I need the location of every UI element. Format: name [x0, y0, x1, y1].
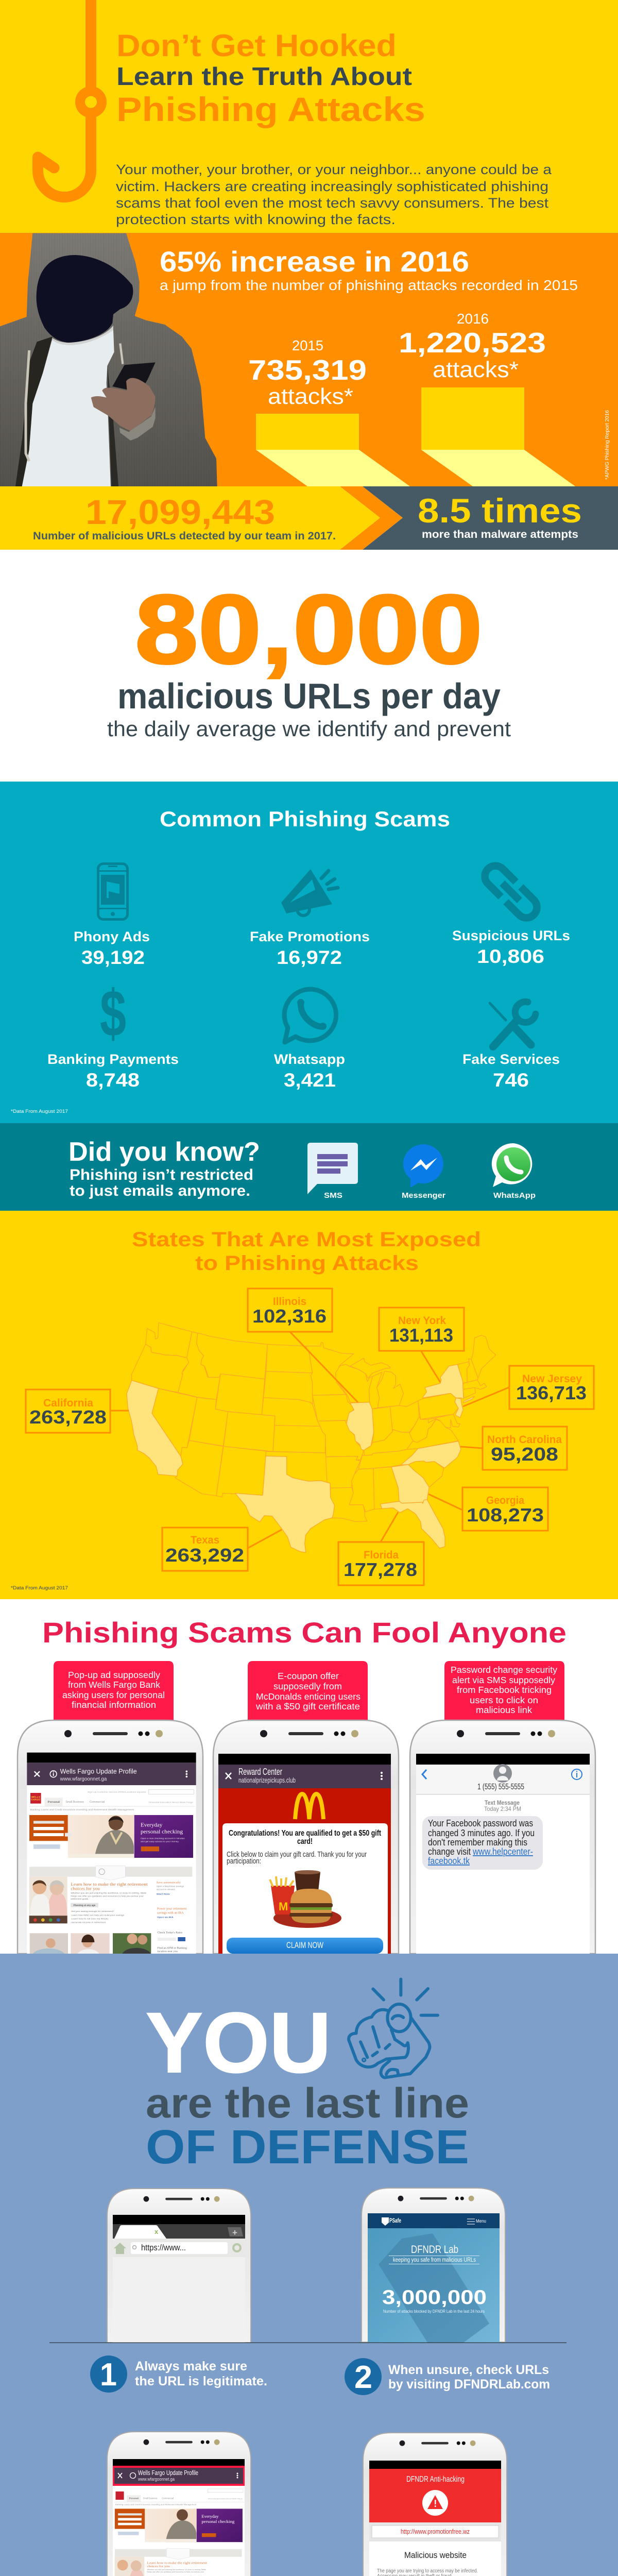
item: banking payments [47, 977, 179, 1091]
callout: Facebook SMS description: malicious link [476, 1705, 532, 1715]
phone screen: spoofed bank site: Learn how to make the right retirement [71, 1882, 148, 1887]
phone: Facebook SMS: 1 (555) 555-5555 [477, 1783, 524, 1791]
title: Learn the Truth About [116, 63, 412, 91]
stat: 8.5 times: more than malware attempts [422, 529, 578, 540]
item: fake promotions [250, 869, 370, 968]
callout: New York: New York [398, 1315, 446, 1327]
title: Phishing Attacks [116, 90, 425, 128]
subheading: a jump from the number of phishing attacks recorded in 2015 [160, 277, 578, 293]
phone screen: spoofed bank site: choices for you [71, 1887, 100, 1891]
panel: common phishing scams [0, 782, 618, 1123]
panel: phishing scams can fool anyone [0, 1599, 618, 1954]
callout: McDonalds description [248, 1661, 368, 1721]
coupon card: Click below to claim your gift card. Thank you for your [227, 1850, 367, 1859]
text message bubble: don't remember making this [428, 1837, 527, 1848]
callout: Florida: Florida [364, 1549, 399, 1561]
heading: malicious URLs per day [117, 676, 501, 716]
phone screen: spoofed bank site small: Small Business [143, 2497, 158, 2500]
title: Don’t Get Hooked [116, 28, 397, 63]
item: fake promotions: Fake Promotions [250, 929, 370, 944]
phone screen: spoofed bank site small: personal checking [201, 2519, 235, 2524]
phone screen: spoofed bank site: Sign Up Customer Service ATMs/Locations Español [88, 1790, 146, 1793]
map: eastern US states [336, 1335, 496, 1512]
heading: to Phishing Attacks [195, 1252, 419, 1275]
callout: Facebook SMS description [444, 1661, 564, 1721]
phone screen: spoofed bank site: FARGO [31, 1798, 41, 1801]
stat: malicious URLs detected [33, 493, 336, 542]
step 2: by visiting DFNDRLab.com [388, 2377, 550, 2392]
step 1: 1 [100, 2357, 117, 2393]
callout: Facebook SMS description: users to click on [470, 1695, 538, 1705]
phone: DFNDR Lab site: DFNDR Lab [411, 2244, 458, 2256]
heading: 65% increase: 65% increase in 2016 [160, 245, 469, 278]
item: whatsapp: Whatsapp [274, 1052, 345, 1067]
phone screen: spoofed bank site: Financial Education About Wells Fargo [149, 1801, 194, 1803]
icon: wrench and screwdriver [490, 1002, 536, 1047]
item: suspicious urls: 10,806 [477, 946, 544, 967]
phone screen: spoofed bank site: Banking Loans and Credit Insurance Investing and Retirement Wealth Management [30, 1808, 134, 1811]
phone screen: spoofed bank site: location near you [158, 1951, 178, 1953]
phone: McDonalds coupon: nationalprizepickups.club [238, 1776, 296, 1784]
step 1: the URL is legitimate. [135, 2374, 267, 2388]
icon: dollar sign: $ [100, 977, 126, 1050]
phone: DFNDR Lab site: keeping you safe from malicious URLs [393, 2257, 476, 2263]
stat: malicious URLs detected: Number of malicious URLs detected by our team in 2017. [33, 530, 336, 542]
phone screen: spoofed bank site: Open an IRA [157, 1916, 174, 1919]
phone screen: spoofed bank site: Generate income in retirement [71, 1921, 106, 1923]
heading [132, 1228, 481, 1275]
callout: Texas: 263,292 [165, 1545, 244, 1566]
phone screen: spoofed bank site: Learn how to roll over my 401(k) [71, 1917, 109, 1920]
icon: SMS [307, 1143, 358, 1200]
icon: pointing hand [349, 1979, 438, 2078]
callout: New Jersey: 136,713 [516, 1382, 587, 1403]
icon: chain link [480, 861, 541, 922]
callout: Illinois: Illinois [273, 1296, 306, 1308]
phone screen: spoofed bank site: Start Now [157, 1893, 170, 1895]
phone: McDonalds coupon [213, 1720, 399, 1954]
intro paragraph: scams that fool even the most tech savvy consumers. The best [116, 195, 549, 211]
callout: California [26, 1389, 110, 1433]
item: fake services: Fake Services [462, 1052, 560, 1067]
callout: Georgia: 108,273 [467, 1504, 544, 1526]
phone screen: spoofed bank site: personal checking [141, 1828, 183, 1835]
text message bubble: change visit [428, 1846, 471, 1857]
bar: 2016 attacks: 1,220,523 [399, 327, 546, 359]
step 1: Always make sure [135, 2359, 247, 2374]
phone screen: spoofed bank site: Are you saving enough for retirement? [71, 1910, 115, 1912]
icon: WhatsApp: WhatsApp [493, 1191, 536, 1200]
phone: DFNDR anti-hacking alert: DFNDR Anti-hacking [406, 2475, 465, 2484]
text message bubble: facebook.tk [428, 1856, 470, 1866]
phone: DFNDR Lab site: Number of attacks blocked by DFNDR Lab in the last 24 hours [383, 2309, 485, 2314]
phone screen: spoofed bank site: Learn how IRAs can help you build your savings [71, 1913, 124, 1916]
callout: McDonalds description: with a $50 gift certificate [255, 1701, 360, 1711]
item: fake promotions: 16,972 [277, 947, 342, 968]
callout: North Carolina: North Carolina [487, 1434, 562, 1446]
callout: McDonalds description: supposedly from [273, 1681, 342, 1691]
phone screen: spoofed bank site: Commercial [90, 1801, 105, 1804]
panel: 65% increase statistics [0, 233, 618, 486]
callout: Georgia: Georgia [486, 1495, 524, 1506]
callout text: to just emails anymore. [70, 1182, 250, 1199]
callout: California: 263,728 [29, 1406, 107, 1428]
divider: row 1 shelf [49, 2342, 566, 2343]
footnote: *Data From August 2017 [11, 1109, 68, 1114]
panel: stat ribbon [0, 486, 618, 550]
phone screen: spoofed bank site small: Learn how to make the right retirement [147, 2561, 207, 2565]
item: phony ads: Phony Ads [74, 929, 150, 944]
phone: McDonalds coupon: Reward Center [238, 1767, 282, 1777]
step 2 [345, 2358, 550, 2395]
bar: 2015 attacks: 735,319 [248, 354, 367, 386]
bar: 2016 attacks: attacks* [433, 357, 519, 382]
title [116, 28, 425, 128]
callout: Wells Fargo description: financial information [72, 1700, 156, 1710]
stat: 8.5 times: 8.5 times [418, 492, 582, 530]
bar: 2015 attacks [248, 337, 410, 486]
item: phony ads: 39,192 [81, 947, 145, 968]
panel: 80,000 malicious URLs per day [0, 550, 618, 782]
panel: intro header [0, 0, 618, 233]
phone screen: spoofed bank site small: choices for you [147, 2565, 170, 2568]
callout: Illinois: 102,316 [252, 1306, 327, 1327]
phone screen: spoofed bank site: Personal [48, 1801, 60, 1804]
callout: Florida [338, 1542, 424, 1585]
phone: Facebook SMS: Text Message [485, 1799, 520, 1806]
phone: DFNDR anti-hacking alert: http://www.promotionfree.wz [401, 2528, 470, 2535]
bar: 2016 attacks [399, 311, 575, 486]
phone: DFNDR anti-hacking alert: Malicious website [404, 2550, 467, 2560]
illustration: hooded hacker holding phone [0, 233, 217, 486]
callout: New Jersey: New Jersey [522, 1373, 582, 1385]
phone: DFNDR anti-hacking alert: The page you are trying to access may be infected. [377, 2568, 478, 2574]
phone screen: spoofed bank site [27, 1753, 196, 1954]
callout: North Carolina [483, 1427, 567, 1470]
intro paragraph: Your mother, your brother, or your neighbor... anyone could be a [116, 162, 552, 177]
logo: McDonalds arches [295, 1794, 323, 1819]
heading: are the last line: are the last line [146, 2080, 469, 2127]
phone: spoofed site highlighted [107, 2432, 251, 2576]
callout: Texas: Texas [191, 1534, 219, 1546]
phone: URL bar: https://www... [141, 2243, 186, 2252]
phone screen: spoofed bank site small: Whether you are just entering the workforce, or close to retiring, Wells [147, 2569, 206, 2571]
stat: malicious URLs detected: 17,099,443 [85, 493, 275, 532]
icon: SMS: SMS [324, 1191, 342, 1200]
phone: DFNDR anti-hacking alert [363, 2433, 507, 2576]
subheading: the daily average we identify and prevent [107, 717, 511, 741]
panel: states most exposed [0, 1211, 618, 1599]
phone: spoofed site highlighted: Wells Fargo Update Profile [138, 2469, 198, 2477]
callout: Florida: 177,278 [344, 1559, 417, 1580]
phone: Facebook SMS [410, 1720, 595, 1954]
callout text: Did you know? [68, 1137, 260, 1167]
callout: Wells Fargo description: Pop-up ad supposedly [68, 1670, 160, 1680]
icon: Messenger: Messenger [402, 1191, 445, 1200]
phone screen: spoofed bank site: Planning at any age [74, 1904, 96, 1906]
phone screen: spoofed bank site: retirement goals. [71, 1897, 89, 1900]
step 1 [90, 2355, 267, 2393]
coupon card: card! [297, 1837, 313, 1846]
coupon card: Congratulations! You are qualified to get a $50 gift [229, 1829, 382, 1838]
phone: Wells Fargo pop-up [18, 1720, 203, 1954]
callout: Facebook SMS description: Password change security [451, 1665, 557, 1675]
callout: New York: 131,113 [389, 1325, 453, 1346]
callout: Facebook SMS description: from Facebook tricking [457, 1685, 552, 1695]
phone screen: spoofed bank site: Small Business [65, 1801, 84, 1804]
item: fake services: 746 [493, 1070, 529, 1091]
phone: DFNDR Lab site: Menu [476, 2218, 486, 2224]
callout: Georgia [462, 1487, 548, 1531]
callout: California: California [43, 1397, 93, 1409]
phone screen: spoofed bank site: WELLS [31, 1795, 40, 1798]
item: suspicious urls: Suspicious URLs [452, 928, 570, 943]
panel: did you know [0, 1123, 618, 1211]
phone screen: spoofed bank site: Save automatically [157, 1881, 181, 1884]
callout: North Carolina: 95,208 [491, 1444, 558, 1465]
phone screen: spoofed bank site small: Personal [129, 2497, 139, 2500]
icon: Messenger [402, 1144, 445, 1200]
phone: URL bar: + [232, 2228, 237, 2238]
item: whatsapp: 3,421 [284, 1070, 336, 1091]
icon: whatsapp outline [284, 989, 336, 1042]
callout: Wells Fargo description [54, 1661, 174, 1721]
heading: States That Are Most Exposed [132, 1228, 481, 1251]
phone: Facebook SMS: Today 2:34 PM [484, 1805, 521, 1812]
intro paragraph: victim. Hackers are creating increasingly sophisticated phishing [116, 179, 548, 194]
map: highlighted Illinois, New York, New Jersey, North Carolina, Georgia, Florida [347, 1364, 475, 1548]
step 2: 2 [354, 2360, 372, 2395]
image: burger meal [270, 1870, 341, 1928]
callout text [68, 1137, 260, 1199]
big number: 80,000 [135, 575, 483, 684]
bar: 2015 attacks: 2015 [292, 337, 323, 353]
coupon card: participation: [227, 1857, 261, 1866]
image: burger meal: M [279, 1900, 288, 1913]
phone screen: spoofed bank site small: Financial Education About Wells Fargo [208, 2498, 243, 2500]
callout text: Phishing isn’t restricted [70, 1166, 253, 1183]
icon: fishing hook [38, 0, 102, 197]
phone screen: spoofed bank site: account in minutes. [157, 1888, 176, 1890]
heading: Common Phishing Scams [160, 807, 450, 831]
phone screen: spoofed bank site small: Commercial [162, 2497, 174, 2500]
phone: DFNDR Lab site: PSafe [389, 2217, 401, 2224]
callout: Wells Fargo description: from Wells Fargo Bank [68, 1680, 160, 1690]
icon: megaphone [281, 869, 338, 916]
icon: phone with flag [98, 863, 128, 919]
phone screen: spoofed bank site: www.wfargoonnet.ga [60, 1776, 107, 1782]
map: highlighted California and Texas [127, 1380, 334, 1552]
callout: New Jersey [509, 1366, 594, 1409]
phone: spoofed site highlighted: www.wfargoonnet.ga [138, 2477, 175, 2482]
connector lines [110, 1332, 509, 1548]
phone screen: spoofed bank site small: Everyday [201, 2514, 219, 2519]
item: banking payments: 8,748 [86, 1070, 140, 1091]
text message bubble [422, 1816, 543, 1870]
callout: Facebook SMS description: alert via SMS supposedly [452, 1675, 555, 1685]
intro paragraph: protection starts with knowing the facts. [116, 212, 396, 227]
footnote: *Data From August 2017 [11, 1585, 68, 1591]
phone screen: spoofed bank site: savings with an IRA [157, 1912, 184, 1915]
stat: 8.5 times [418, 492, 582, 540]
phone screen: spoofed bank site: Whether you are just entering the workforce, or close to retiring, Wells [71, 1892, 146, 1894]
heading: YOU: YOU [146, 1995, 331, 2091]
heading: Phishing Scams Can Fool Anyone [42, 1616, 566, 1649]
step 2: When unsure, check URLs [388, 2363, 549, 2377]
phone: URL bar [107, 2189, 251, 2343]
text message bubble: changed 3 minutes ago. If you [428, 1828, 535, 1838]
button: claim now [227, 1938, 383, 1954]
callout: New York [379, 1308, 464, 1351]
icon: WhatsApp [492, 1143, 536, 1200]
phone screen: spoofed bank site: Fargo can offer you guidance and resources to help you pursue your [71, 1895, 144, 1897]
intro paragraph [116, 162, 552, 227]
text message bubble: www.helpcenter- [472, 1846, 533, 1857]
item: banking payments: Banking Payments [47, 1052, 179, 1067]
callout: Illinois [248, 1289, 332, 1332]
panel: you are the last line of defense [0, 1954, 618, 2576]
item: suspicious urls [452, 861, 570, 967]
phone screen: spoofed bank site: Wells Fargo Update Profile [60, 1767, 137, 1775]
phone screen: spoofed bank site small: Fargo can offer you guidance and resources to help you pursue your [147, 2571, 204, 2573]
phone screen: spoofed bank site small [115, 2489, 244, 2576]
phone screen: spoofed bank site: Open a Way2Save Savings [157, 1885, 184, 1888]
phone screen: spoofed bank site: and get easy access to your money. [141, 1840, 179, 1842]
item: phony ads [74, 863, 150, 968]
button: claim now: CLAIM NOW [286, 1940, 323, 1950]
text message bubble: Your Facebook password was [428, 1818, 533, 1828]
bar: 2016 attacks: 2016 [457, 311, 489, 327]
callout: McDonalds description: E-coupon offer [278, 1671, 339, 1681]
phone: DFNDR Lab site [362, 2188, 505, 2343]
phone screen: spoofed bank site: Find an ATM or Banking [158, 1947, 187, 1950]
callout: McDonalds description: McDonalds enticing users [256, 1691, 360, 1702]
callout: Wells Fargo description: asking users for personal [62, 1690, 165, 1700]
callout: Texas [162, 1528, 248, 1571]
phone: URL bar: x [154, 2228, 159, 2235]
heading: of defense: OF DEFENSE [146, 2120, 469, 2174]
item: fake services [462, 1002, 560, 1091]
source note: *APWG Phishing Report 2016 [605, 410, 610, 480]
bar: 2015 attacks: attacks* [268, 384, 353, 409]
coupon card [222, 1823, 388, 1954]
phone: DFNDR Lab site: 3,000,000 [382, 2286, 487, 2309]
phone screen: spoofed bank site small: Banking Loans and Credit Insurance Investing and Retirement Wealth Management [115, 2503, 196, 2505]
phone screen: spoofed bank site: Everyday [141, 1822, 163, 1828]
phone screen: spoofed bank site: Open a new checking account in minutes [141, 1837, 185, 1839]
item: whatsapp [274, 989, 345, 1091]
map: western and central US states [132, 1323, 367, 1521]
phone screen: spoofed bank site: Check Today's Rates [158, 1931, 182, 1934]
phone screen: spoofed bank site: Power your retirement [157, 1908, 187, 1911]
